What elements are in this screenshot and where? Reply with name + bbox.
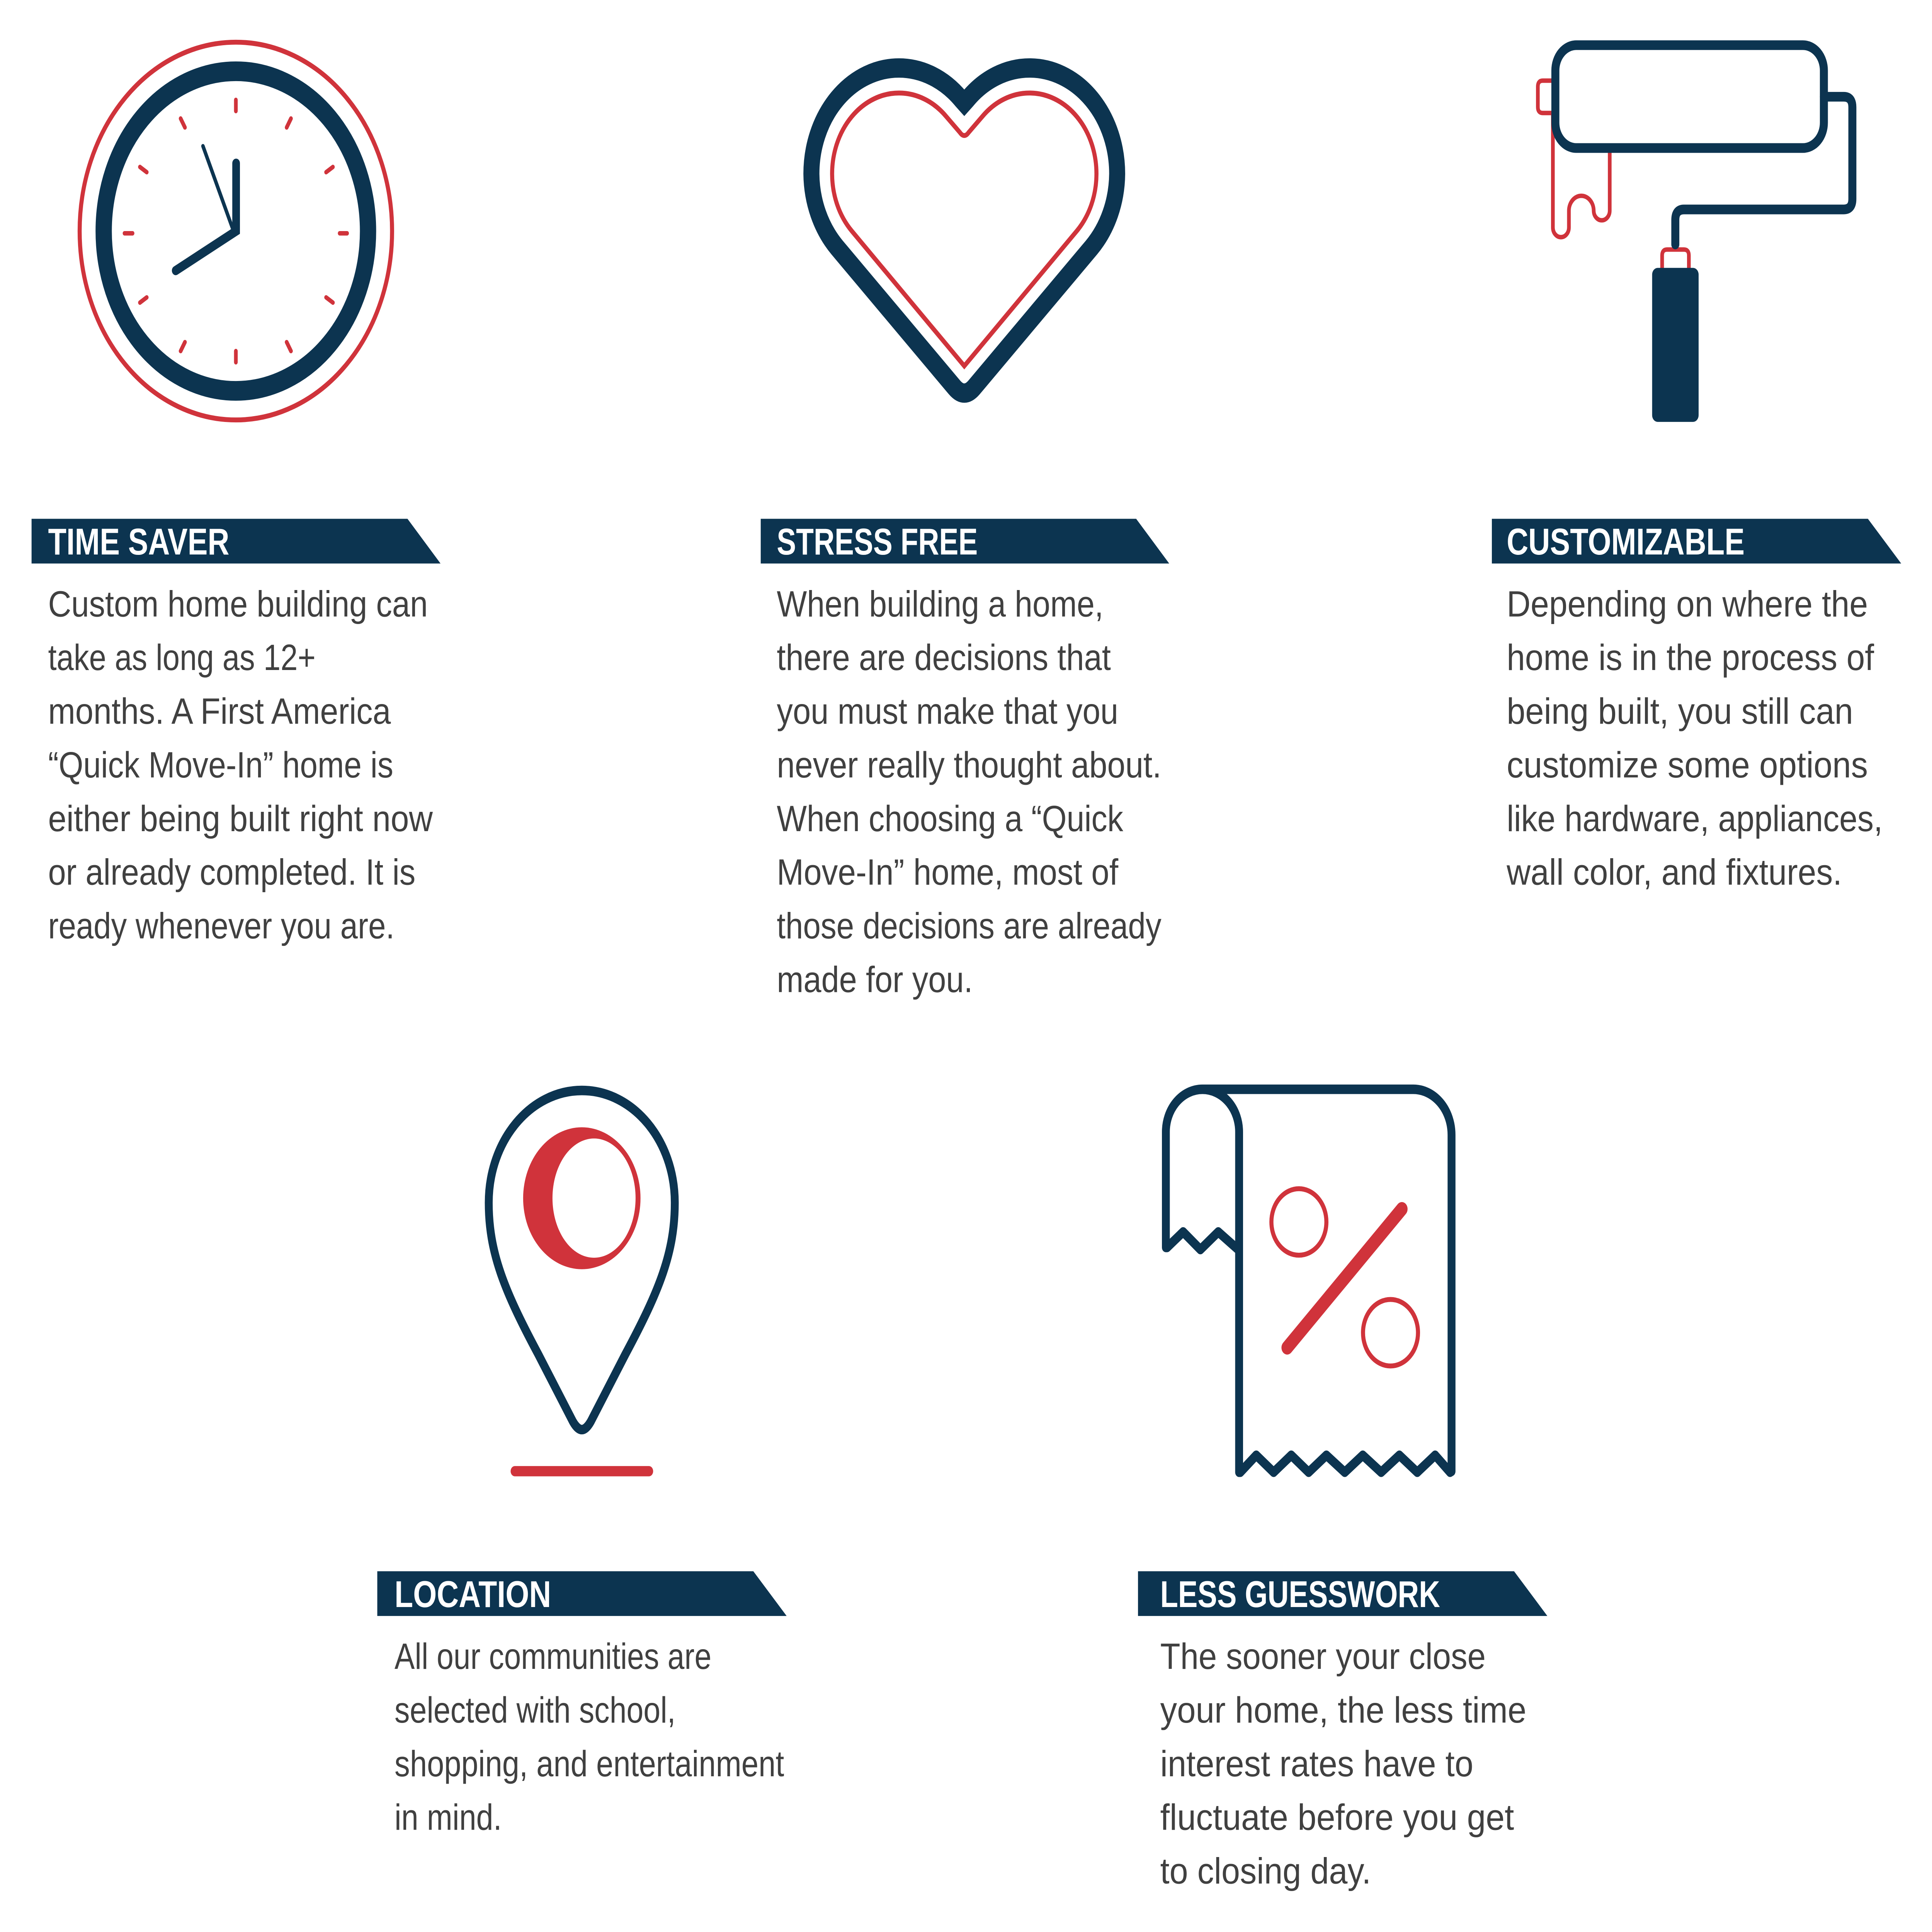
text: time saver: “Quick Move-In” home is [48,745,393,786]
panel: location [377,1090,787,1838]
text: less guesswork: interest rates have to [1160,1743,1473,1784]
text: stress free: never really thought about. [777,745,1162,786]
text: less guesswork [1160,1636,1526,1891]
heading banner: less guesswork: LESS GUESSWORK [1160,1573,1440,1615]
clock hands [176,146,236,270]
text: less guesswork: your home, the less time [1160,1690,1526,1731]
icon: clock [80,42,392,420]
heading banner: time saver [32,519,440,563]
text: time saver [48,583,433,946]
heading banner: stress free [761,519,1169,563]
text: location: shopping, and entertainment [395,1743,784,1784]
text: customizable [1506,583,1883,893]
icon: heart [811,68,1117,393]
text: stress free: When choosing a “Quick [777,798,1123,839]
panel: customizable [1492,45,1901,893]
text: stress free [777,583,1162,1000]
text: less guesswork: fluctuate before you get [1160,1797,1514,1838]
text: location [395,1636,784,1838]
panel: time saver [32,42,440,946]
text: location: All our communities are [395,1636,711,1677]
text: location: in mind. [395,1797,502,1838]
heading banner: location [377,1571,787,1616]
icon: paint roller [1538,45,1852,422]
text: stress free: those decisions are already [777,906,1162,946]
text: time saver: or already completed. It is [48,852,415,893]
text: customizable: customize some options [1507,745,1868,786]
text: stress free: When building a home, [777,583,1104,624]
text: location: selected with school, [395,1690,676,1731]
text: customizable: being built, you still can [1507,691,1853,732]
text: customizable: like hardware, appliances, [1507,798,1883,839]
text: less guesswork: to closing day. [1160,1851,1371,1891]
heading banner: stress free: STRESS FREE [777,521,978,563]
text: customizable: wall color, and fixtures. [1506,852,1842,893]
text: stress free: Move-In” home, most of [777,852,1119,893]
heading banner: customizable [1492,519,1901,563]
heading banner: location: LOCATION [395,1573,551,1615]
text: time saver: take as long as 12+ [48,637,316,678]
text: stress free: you must make that you [777,691,1118,732]
text: time saver: months. A First America [48,691,391,732]
text: customizable: home is in the process of [1507,637,1874,678]
icon: map pin [489,1090,675,1471]
text: time saver: Custom home building can [48,583,428,624]
text: time saver: either being built right now [48,798,433,839]
text: time saver: ready whenever you are. [48,906,395,946]
text: customizable: Depending on where the [1507,583,1868,624]
text: stress free: made for you. [777,959,973,1000]
heading banner: time saver: TIME SAVER [48,521,229,563]
panel: stress free [761,68,1169,1000]
heading banner: customizable: CUSTOMIZABLE [1507,521,1745,563]
heading banner: less guesswork [1138,1571,1547,1616]
icon: receipt with percent [1166,1089,1452,1472]
panel: less guesswork [1138,1089,1547,1891]
text: stress free: there are decisions that [777,637,1111,678]
text: less guesswork: The sooner your close [1160,1636,1486,1677]
